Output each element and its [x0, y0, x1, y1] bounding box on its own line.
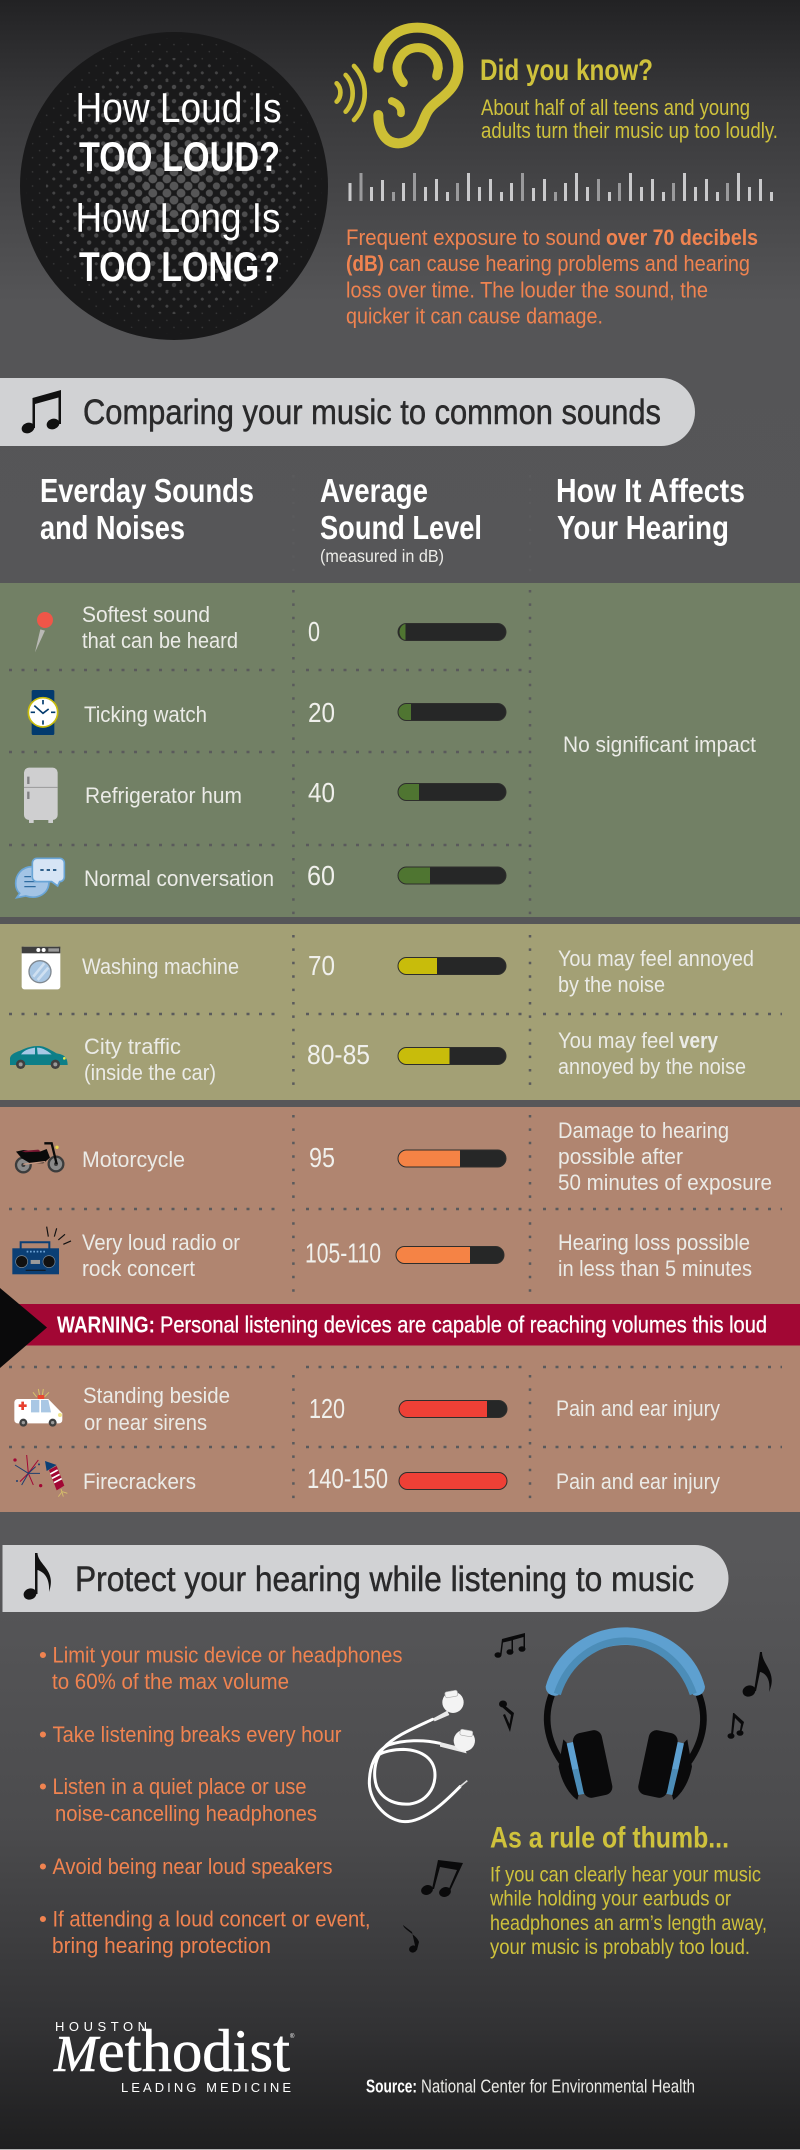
impact: You may feel — [558, 1028, 674, 1053]
exposure text block: loss over time. The louder the sound, the — [346, 278, 708, 302]
sound wave decoration — [348, 173, 773, 201]
impact: no significant impact: No significant impact — [563, 732, 757, 757]
level: 70 — [308, 950, 335, 981]
bar — [399, 1472, 507, 1490]
row: motorcycle — [16, 1118, 772, 1195]
table column headers: (measured in dB) — [320, 546, 444, 566]
logo: Houston Methodist: Methodist — [53, 2018, 290, 2084]
label — [82, 602, 238, 653]
level: 120 — [309, 1393, 345, 1424]
row: loud radio — [12, 1227, 752, 1281]
label: or near sirens — [84, 1410, 207, 1435]
label: Washing machine — [82, 954, 239, 979]
row: softest sound — [35, 602, 506, 653]
icon: refrigerator — [24, 768, 58, 823]
icons: floating music notes — [403, 1633, 772, 1954]
bar — [398, 958, 506, 974]
warning text: WARNING: — [57, 1312, 155, 1338]
row: city traffic — [10, 1028, 746, 1085]
row: washing machine — [22, 946, 754, 997]
label — [83, 1383, 230, 1435]
logo: Houston Methodist: LEADING MEDICINE — [121, 2080, 291, 2095]
bar — [398, 784, 506, 800]
label: rock concert — [82, 1256, 196, 1281]
tips list: • — [39, 1643, 47, 1668]
table column headers: Your Hearing — [557, 509, 729, 546]
tips list: Listen in a quiet place or use — [52, 1774, 306, 1799]
rule of thumb callout — [489, 1822, 767, 1959]
heading text: Comparing your music to common sounds — [83, 393, 661, 432]
label: Ticking watch — [84, 702, 207, 727]
bar — [399, 1400, 507, 1418]
did you know callout — [480, 54, 778, 143]
rule of thumb callout: while holding your earbuds or — [489, 1887, 731, 1911]
label: Standing beside — [83, 1383, 230, 1408]
icon: ear with sound waves — [337, 28, 458, 143]
source line: National Center for Environmental Health — [421, 2076, 695, 2096]
label: (inside the car) — [84, 1060, 216, 1085]
section heading: protect — [2, 1545, 728, 1612]
table column headers — [40, 472, 745, 566]
tips list: • — [39, 1774, 47, 1799]
title text: How Loud Is — [76, 84, 282, 131]
bar — [398, 1048, 506, 1064]
level: 105-110 — [305, 1238, 381, 1268]
icon: earbuds — [369, 1690, 475, 1822]
row: normal conversation — [16, 858, 506, 898]
label: Normal conversation — [84, 866, 274, 891]
icon: watch — [28, 690, 58, 735]
impact: 50 minutes of exposure — [558, 1170, 772, 1195]
icon: fireworks and rocket — [13, 1455, 67, 1497]
level: 140-150 — [307, 1463, 388, 1494]
table column headers: Everday Sounds — [40, 472, 254, 509]
exposure text block: quicker it can cause damage. — [346, 304, 603, 328]
panel: tan damaging band — [0, 1107, 800, 1512]
title circle — [20, 32, 328, 340]
icon: chat bubbles — [16, 858, 64, 898]
label — [84, 1034, 216, 1085]
row: sirens — [14, 1383, 721, 1435]
tips list: Avoid being near loud speakers — [52, 1854, 332, 1879]
icon: motorcycle — [16, 1143, 63, 1172]
label — [82, 1230, 240, 1281]
bar — [398, 1150, 506, 1167]
impact: Pain and ear injury — [556, 1396, 721, 1421]
impact — [558, 1230, 752, 1281]
table column headers: and Noises — [40, 509, 185, 546]
icon: pin — [35, 612, 53, 652]
exposure text block — [346, 225, 758, 328]
impact: by the noise — [558, 972, 665, 997]
row: refrigerator hum — [24, 768, 506, 823]
logo: Houston Methodist: ® — [290, 2033, 295, 2040]
exposure text block: Frequent exposure to sound — [346, 225, 601, 250]
panel: olive annoying band — [0, 924, 800, 1100]
label: Firecrackers — [83, 1469, 196, 1494]
panel: green safe band — [0, 583, 800, 917]
label: Refrigerator hum — [85, 783, 242, 808]
impact — [558, 1028, 746, 1079]
arrow: black pointer — [0, 1288, 47, 1368]
tips list: Take listening breaks every hour — [52, 1722, 342, 1747]
tips list: noise-cancelling headphones — [55, 1801, 317, 1826]
rule of thumb callout: your music is probably too loud. — [490, 1935, 750, 1959]
exposure text block: over 70 decibels — [606, 225, 758, 250]
title text — [76, 84, 282, 290]
icon: double music note — [20, 390, 61, 435]
exposure text block: can cause hearing problems and hearing — [389, 251, 750, 276]
impact — [558, 946, 754, 997]
bar — [396, 1246, 504, 1264]
section heading: comparing — [0, 378, 695, 446]
logo: Houston Methodist: HOUSTON — [55, 2019, 147, 2034]
impact: annoyed by the noise — [558, 1054, 746, 1079]
label: Softest sound — [82, 602, 210, 627]
warning banner — [0, 1288, 800, 1368]
row: ticking watch — [28, 690, 506, 735]
table column headers: Sound Level — [320, 509, 482, 546]
source line: Source: — [366, 2076, 417, 2096]
label: Motorcycle — [82, 1147, 185, 1172]
impact — [558, 1118, 772, 1195]
exposure text block: (dB) — [346, 251, 384, 276]
level: 80-85 — [307, 1039, 370, 1070]
impact: Damage to hearing — [558, 1118, 729, 1143]
level: 40 — [308, 777, 335, 808]
title text: TOO LOUD? — [79, 133, 280, 180]
impact: You may feel annoyed — [558, 946, 754, 971]
label: that can be heard — [82, 628, 238, 653]
impact: Hearing loss possible — [558, 1230, 750, 1255]
tips list: • — [39, 1907, 47, 1932]
did you know callout: About half of all teens and young — [481, 95, 750, 120]
title text: How Long Is — [76, 194, 280, 241]
impact: Pain and ear injury — [556, 1469, 721, 1494]
icon: car — [10, 1046, 68, 1069]
bar — [398, 867, 506, 884]
tips list: • — [39, 1854, 47, 1879]
icon: headphones — [546, 1627, 705, 1800]
did you know callout: Did you know? — [480, 54, 653, 87]
rule of thumb callout: As a rule of thumb... — [490, 1822, 729, 1854]
tips list: Limit your music device or headphones — [52, 1643, 402, 1668]
impact: very — [679, 1028, 718, 1053]
icon: ambulance — [14, 1389, 62, 1427]
heading text: Protect your hearing while listening to music — [75, 1560, 694, 1599]
level: 95 — [309, 1142, 335, 1173]
tips list: to 60% of the max volume — [52, 1669, 289, 1694]
tips list: • — [39, 1722, 47, 1747]
table column headers: Average — [320, 472, 428, 509]
label: Very loud radio or — [82, 1230, 240, 1255]
tips list: bring hearing protection — [52, 1933, 271, 1958]
row: firecrackers — [13, 1455, 721, 1497]
level: 60 — [307, 860, 335, 891]
bar — [398, 624, 506, 640]
tips list: If attending a loud concert or event, — [52, 1907, 370, 1932]
impact: in less than 5 minutes — [558, 1256, 752, 1281]
table column headers: How It Affects — [556, 472, 745, 509]
bar — [398, 704, 506, 720]
level: 20 — [308, 697, 335, 728]
icon: single music note — [22, 1553, 51, 1601]
icon: washing machine — [22, 947, 60, 989]
impact: possible after — [558, 1144, 683, 1169]
title text: TOO LONG? — [79, 243, 280, 290]
tips list — [39, 1643, 402, 1958]
level: 0 — [308, 616, 320, 647]
label: City traffic — [84, 1034, 181, 1059]
icon: boombox — [12, 1227, 71, 1274]
